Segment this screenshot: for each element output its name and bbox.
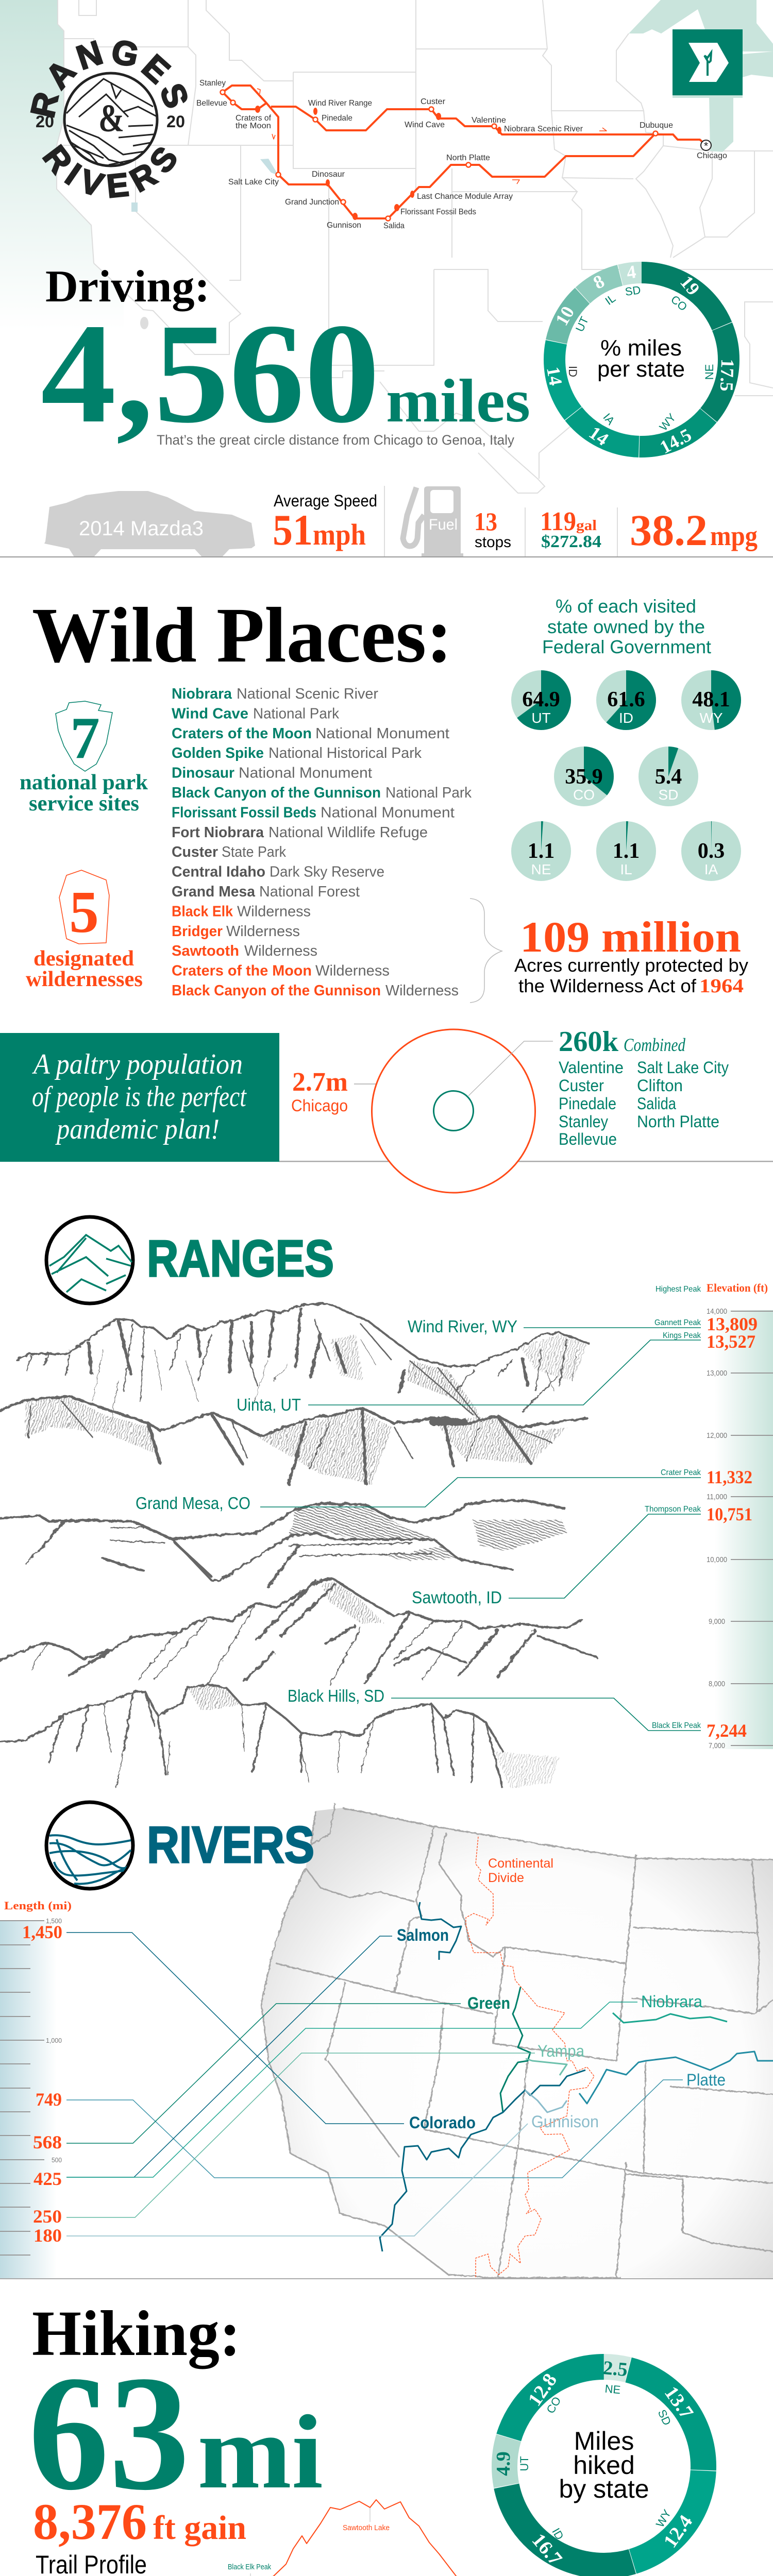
route labels: Dinosaur (312, 170, 345, 179)
brace: wilderness group (470, 899, 502, 1003)
labels: highest peaks: Gannett Peak (654, 1318, 701, 1327)
icon: wilderness shield (59, 870, 109, 945)
panel: driving (0, 261, 773, 557)
chart: percent miles per state donut: IL (603, 292, 618, 308)
callout: paltry population: A paltry population (31, 1048, 243, 1080)
panel: hiking (0, 2298, 749, 2576)
icon: fuel pump: Fuel (429, 516, 458, 533)
route labels: Salt Lake City (228, 178, 279, 187)
chart: miles hiked by state donut (493, 2357, 703, 2570)
route labels: Chicago (697, 151, 727, 160)
rivers: traced courses (380, 1902, 773, 2251)
chart: federal land pies: ID (619, 710, 633, 726)
chart: percent miles per state donut: WY (657, 411, 679, 433)
logo: ranges and rivers badge: RANGES (30, 40, 188, 118)
list: wild places: National Historical Park (268, 745, 422, 761)
stat: mpg: mpg (710, 520, 758, 551)
chart: miles hiked by state donut: 16.7 (528, 2530, 566, 2570)
scale: river length: 1,500 (46, 1917, 62, 1925)
list: wild places: National Monument (321, 804, 455, 821)
scale: elevation gradient: 11,000 (707, 1493, 727, 1501)
list: wild places: Grand Mesa (172, 884, 256, 900)
stat: chicago population: 2.7m (292, 1067, 348, 1097)
stat: fuel stops: 13 (474, 507, 497, 536)
stat: average speed (273, 492, 377, 554)
callout: paltry population (0, 1033, 279, 1162)
heading: hiking: Hiking: (32, 2298, 241, 2369)
chart: miles hiked by state donut: 13.7 (660, 2382, 697, 2423)
stat: total miles: miles (386, 366, 530, 435)
labels: river names: Niobrara (641, 1992, 702, 2011)
list: wild places: National Monument (239, 765, 372, 782)
route labels (196, 79, 727, 230)
stat: total miles: 4,560 (41, 294, 380, 453)
route labels: Custer (421, 97, 446, 106)
stat: fuel stops: stops (475, 534, 511, 551)
scale: river length: 1,450 (22, 1922, 62, 1942)
logo: rivers circle (46, 1802, 133, 1889)
chart: miles hiked by state donut: 12.4 (660, 2511, 697, 2552)
scale: elevation gradient (656, 1281, 773, 1750)
stat: elevation gain: ft gain (153, 2509, 246, 2547)
list: wild places: Niobrara (172, 686, 232, 702)
sketch: sawtooth range (0, 1579, 597, 1685)
stat: gallons and cost (540, 507, 601, 551)
stat: elevation gain: 8,376 (33, 2493, 147, 2550)
chart: miles hiked by state donut: Miles (574, 2427, 634, 2455)
scale: river length: 1,000 (46, 2037, 62, 2044)
heading: federal ownership: state owned by the (547, 616, 705, 637)
list: wild places: Dark Sky Reserve (270, 864, 384, 880)
map: continental divide: Divide (488, 1871, 524, 1885)
heading: rivers: RIVERS (147, 1816, 314, 1874)
panel: rivers (0, 1802, 773, 2279)
stat: combined population towns: North Platte (637, 1112, 719, 1131)
callout: paltry population: of people is the perfect (32, 1081, 247, 1113)
chart: federal land pies: 64.9 (522, 688, 560, 711)
map: western states (261, 1803, 773, 2279)
chart: miles hiked by state donut: WY (653, 2507, 674, 2530)
stat: miles hiked (28, 2342, 323, 2524)
labels: highest peaks: 13,809 (707, 1314, 758, 1334)
labels: highest peaks: Kings Peak (663, 1331, 701, 1340)
stat: combined population towns: 260k (559, 1026, 619, 1058)
route labels: Wind River Range (308, 99, 372, 108)
scale: elevation gradient: 9,000 (709, 1617, 725, 1626)
chart: percent miles per state donut: SD (624, 283, 642, 298)
chart: miles hiked by state donut: NE (604, 2382, 621, 2396)
chart: percent miles per state donut: 14 (585, 422, 612, 450)
route labels: Craters of (236, 114, 272, 123)
list: wild places (172, 686, 472, 999)
stat: combined population towns: Salida (637, 1094, 676, 1113)
labels: peaks on chart (228, 2523, 452, 2576)
route labels: Niobrara Scenic River (504, 125, 583, 133)
route labels: North Platte (446, 154, 490, 162)
list: wild places: National Park (253, 705, 339, 722)
chart: federal land pies: IL (620, 861, 632, 877)
stat: combined population towns: Pinedale (559, 1094, 616, 1113)
route labels: Pinedale (322, 114, 352, 123)
chart: percent miles per state donut (543, 261, 738, 457)
heading: federal ownership: Federal Government (542, 636, 711, 657)
icon: wilderness shield: 5 (69, 879, 99, 945)
route stops: * (704, 140, 709, 152)
route labels: the Moon (236, 122, 271, 130)
route labels: Florissant Fossil Beds (400, 208, 476, 216)
chart: miles hiked by state donut: ID (549, 2526, 566, 2542)
route labels: Grand Junction (285, 198, 339, 207)
list: wild places: National Scenic River (237, 686, 378, 702)
labels: highest peaks: Crater Peak (661, 1468, 701, 1477)
list: wild places: National Park (385, 785, 472, 801)
labels: highest peaks: 11,332 (707, 1467, 752, 1487)
stat: average speed: 51 (273, 506, 313, 554)
chart: federal land pies: NE (531, 861, 551, 877)
label: designated wildernesses (26, 947, 143, 991)
scale: river length: 500 (52, 2156, 62, 2164)
scale: elevation gradient: 13,000 (707, 1369, 727, 1378)
labels: highest peaks: 7,244 (707, 1720, 747, 1741)
stat: total miles (41, 294, 530, 453)
list: wild places: National Forest (259, 884, 360, 900)
stat: average speed: Average Speed (274, 492, 377, 510)
chart: federal land pies (511, 670, 741, 881)
chart: federal land pies: 0.3 (698, 839, 725, 863)
scale: river length: 250 (33, 2206, 62, 2227)
scale: river length: 568 (33, 2132, 62, 2153)
panel: wild places (0, 592, 773, 1193)
route labels: Stanley (199, 79, 226, 88)
chart: federal land pies: SD (659, 787, 678, 803)
labels: range names: Wind River, WY (408, 1317, 517, 1336)
list: wild places: Bridger (172, 923, 223, 940)
scale: river length: 749 (36, 2089, 62, 2110)
labels: range names: Grand Mesa, CO (136, 1494, 250, 1513)
stat: miles hiked: mi (197, 2394, 323, 2511)
labels: highest peaks (645, 1314, 758, 1741)
line: sawtooth lake (0, 2500, 727, 2576)
labels: river names: Colorado (409, 2113, 476, 2132)
scale: elevation gradient: 10,000 (707, 1555, 727, 1564)
labels: range names (136, 1317, 517, 1705)
chart: miles hiked by state donut: by state (559, 2475, 649, 2503)
chart: federal land pies: 35.9 (565, 765, 603, 789)
stat: gallons and cost: 119 (540, 507, 576, 536)
labels: range names: Sawtooth, ID (412, 1588, 502, 1607)
list: wild places: Black Elk (172, 903, 233, 920)
list: wild places: Craters of the Moon (172, 963, 312, 979)
stat: combined population towns: Stanley (559, 1112, 608, 1131)
scale: river length: Length (mi) (4, 1899, 72, 1912)
route labels: Wind Cave (405, 121, 445, 129)
chart: percent miles per state donut: % miles (600, 335, 682, 361)
heading: ranges: RANGES (147, 1230, 334, 1287)
chart: percent miles per state donut: 14.5 (657, 425, 695, 457)
chart: percent miles per state donut: UT (573, 315, 591, 334)
map: continental divide: Continental (488, 1856, 553, 1871)
labels: range names: Uinta, UT (237, 1395, 301, 1414)
labels: river names: Yampa (537, 2042, 584, 2060)
chart: percent miles per state donut: 8 (590, 270, 608, 293)
chart: percent miles per state donut: IA (600, 411, 617, 428)
chart: miles hiked by state donut: 2.5 (602, 2357, 628, 2381)
stat: gallons and cost: $272.84 (541, 532, 601, 551)
leaders: river lengths (66, 1933, 683, 2236)
stat: acres protected: 109 million (520, 913, 741, 961)
label: national park service sites: service sites (29, 792, 139, 816)
chart: miles hiked by state donut: 12.8 (524, 2369, 561, 2410)
chart: miles hiked by state donut: CO (544, 2395, 564, 2416)
label: national park service sites: national park (20, 771, 148, 794)
chart: federal land pies: 48.1 (692, 688, 730, 711)
chart: percent miles per state donut: NE (703, 364, 716, 380)
scale: elevation gradient: Elevation (ft) (707, 1281, 768, 1294)
list: wild places: Wilderness (385, 982, 459, 999)
route labels: Dubuque (640, 121, 673, 130)
labels: highest peaks: 13,527 (707, 1331, 755, 1352)
route stops (221, 90, 711, 221)
chart: federal land pies: IA (704, 861, 718, 877)
route labels: Valentine (472, 116, 506, 125)
icon: national park arrowhead: 7 (70, 705, 100, 771)
list: wild places: Wind Cave (172, 705, 248, 722)
chart: federal land pies: CO (573, 787, 595, 803)
list: wild places: Wilderness (226, 923, 300, 940)
list: wild places: Wilderness (244, 943, 317, 959)
callout: paltry population: pandemic plan! (55, 1113, 220, 1145)
map: great lakes (131, 0, 773, 212)
list: wild places: Wilderness (315, 963, 390, 979)
labels: highest peaks: 10,751 (707, 1504, 752, 1524)
route labels: Bellevue (196, 99, 227, 108)
scale: river length: 425 (33, 2168, 62, 2189)
stat: mpg (630, 505, 758, 555)
stat: combined population towns: Clifton (637, 1076, 683, 1095)
panel: ranges (0, 1217, 773, 1788)
heading: wild places: Wild Places: (32, 592, 452, 679)
scale: river length: 180 (33, 2225, 62, 2246)
icon: car silhouette (44, 491, 255, 557)
list: wild places: Fort Niobrara (172, 824, 264, 841)
stat: combined population towns: Valentine (559, 1058, 624, 1077)
list: wild places: Craters of the Moon (172, 725, 312, 742)
sketch: uinta range (0, 1396, 587, 1484)
labels: river names: Platte (686, 2071, 726, 2089)
list: wild places: State Park (222, 844, 286, 860)
scale: elevation gradient: 14,000 (707, 1307, 727, 1316)
chart: percent miles per state donut: 19 (676, 272, 704, 299)
labels: river names (397, 1926, 726, 2132)
chart: federal land pies: 5.4 (655, 765, 682, 789)
chart: percent miles per state donut: ID (566, 366, 579, 377)
logo: green chevron badge (673, 29, 743, 95)
chart: percent miles per state donut: 10 (551, 302, 578, 329)
chart: population circles (372, 1029, 553, 1193)
stat: average speed: mph (313, 518, 366, 551)
chart: federal land pies: 1.1 (528, 839, 554, 863)
map: continental divide (466, 1837, 594, 2277)
scale: elevation gradient: 7,000 (709, 1741, 725, 1750)
label: designated wildernesses: designated (33, 947, 134, 971)
scale: elevation gradient: 12,000 (707, 1431, 727, 1440)
list: wild places: Golden Spike (172, 745, 264, 761)
chart: percent miles per state donut: CO (668, 293, 690, 314)
chart: miles hiked by state donut: 4.9 (493, 2451, 514, 2476)
list: wild places: Sawtooth (172, 943, 239, 959)
heading: driving: Driving: (45, 262, 210, 312)
chart: miles hiked by state donut: hiked (573, 2451, 635, 2480)
caption: great circle distance: That’s the great circle distance from Chicago to Genoa, Italy (157, 432, 514, 448)
chart: trail profile comparison (0, 2500, 749, 2576)
labels: river names: Salmon (397, 1926, 449, 1944)
logo: ranges and rivers badge (30, 40, 188, 198)
logo: ranges and rivers badge: RIVERS (42, 144, 176, 198)
labels: river names: Gunnison (531, 2112, 599, 2131)
scale: river length (0, 1899, 72, 2279)
labels: highest peaks: Thompson Peak (645, 1505, 701, 1514)
sketch: grand mesa (0, 1501, 567, 1587)
chart: miles hiked by state donut: SD (656, 2408, 674, 2427)
chart: federal land pies: UT (531, 710, 551, 726)
logo: ranges circle (46, 1217, 133, 1303)
stat: acres protected (514, 913, 748, 997)
stat: gallons and cost: gal (576, 518, 597, 534)
label: national park service sites (20, 771, 148, 816)
labels: peaks on chart: Sawtooth Lake (343, 2523, 390, 2532)
stat: chicago population: Chicago (291, 1096, 348, 1115)
list: wild places: Florissant Fossil Beds (172, 804, 316, 821)
heading: federal ownership (542, 596, 711, 657)
scale: elevation gradient: 8,000 (709, 1680, 725, 1688)
stat: mpg: 38.2 (630, 505, 708, 555)
labels: range names: Black Hills, SD (288, 1686, 384, 1705)
icon: national park arrowhead (56, 701, 112, 771)
list: wild places: Black Canyon of the Gunnison (172, 785, 381, 801)
heading: federal ownership: % of each visited (556, 596, 696, 617)
stat: combined population towns: Salt Lake City (637, 1058, 729, 1077)
chart: percent miles per state donut: 14 (543, 365, 566, 387)
route labels: Gunnison (327, 221, 361, 230)
sketch: wind river range (17, 1303, 589, 1422)
icon: fuel pump (403, 486, 463, 557)
route line (223, 86, 706, 218)
stat: acres protected: 1964 (699, 975, 744, 997)
labels: river names: Green (467, 1994, 510, 2012)
logo: ranges and rivers badge: 20 (166, 112, 185, 131)
stat: acres protected: the Wilderness Act of (518, 975, 697, 996)
stat: elevation gain (33, 2493, 246, 2550)
stat: combined population towns: Bellevue (559, 1130, 617, 1148)
list: wild places: Black Canyon of the Gunnison (172, 982, 381, 999)
chart: federal land pies: WY (699, 710, 723, 726)
stat: combined population towns: Custer (559, 1076, 604, 1095)
chart: federal land pies: 1.1 (613, 839, 640, 863)
label: designated wildernesses: wildernesses (26, 968, 143, 991)
chart: federal land pies: 61.6 (607, 688, 645, 711)
logo: ranges and rivers badge: & (98, 97, 124, 140)
labels: highest peaks: Black Elk Peak (652, 1721, 701, 1730)
stat: combined population towns (559, 1026, 729, 1148)
stat: miles hiked: 63 (28, 2342, 190, 2524)
labels: peaks on chart: Black Elk Peak (228, 2563, 271, 2571)
labels: range leaders (260, 1328, 701, 1731)
icon: car silhouette: 2014 Mazda3 (79, 517, 204, 540)
sketch: black hills (0, 1684, 559, 1788)
list: wild places: Dinosaur (172, 765, 234, 782)
scale: elevation gradient: Highest Peak (656, 1285, 701, 1294)
logo: ranges and rivers badge: 20 (36, 112, 54, 131)
stat: fuel stops (474, 507, 511, 551)
list: wild places: National Wildlife Refuge (268, 824, 428, 841)
list: wild places: Central Idaho (172, 864, 265, 880)
list: wild places: National Monument (315, 725, 449, 742)
chart: percent miles per state donut: per state (597, 357, 685, 382)
stat: acres protected: Acres currently protected by (514, 955, 748, 976)
route labels: Salida (383, 222, 405, 230)
panel: route map header (0, 0, 773, 494)
chart: miles hiked by state donut: UT (518, 2456, 531, 2471)
stat: chicago population (291, 1067, 376, 1115)
background: pacific gradient (0, 0, 124, 330)
map: state outlines (57, 0, 773, 493)
stat: combined population towns: Combined (624, 1035, 686, 1055)
route labels: Last Chance Module Array (417, 192, 513, 201)
chart: percent miles per state donut: 4 (625, 261, 637, 283)
list: wild places: Custer (172, 844, 218, 860)
chart: percent miles per state donut: 17.5 (716, 359, 738, 392)
list: wild places: Wilderness (237, 903, 311, 920)
